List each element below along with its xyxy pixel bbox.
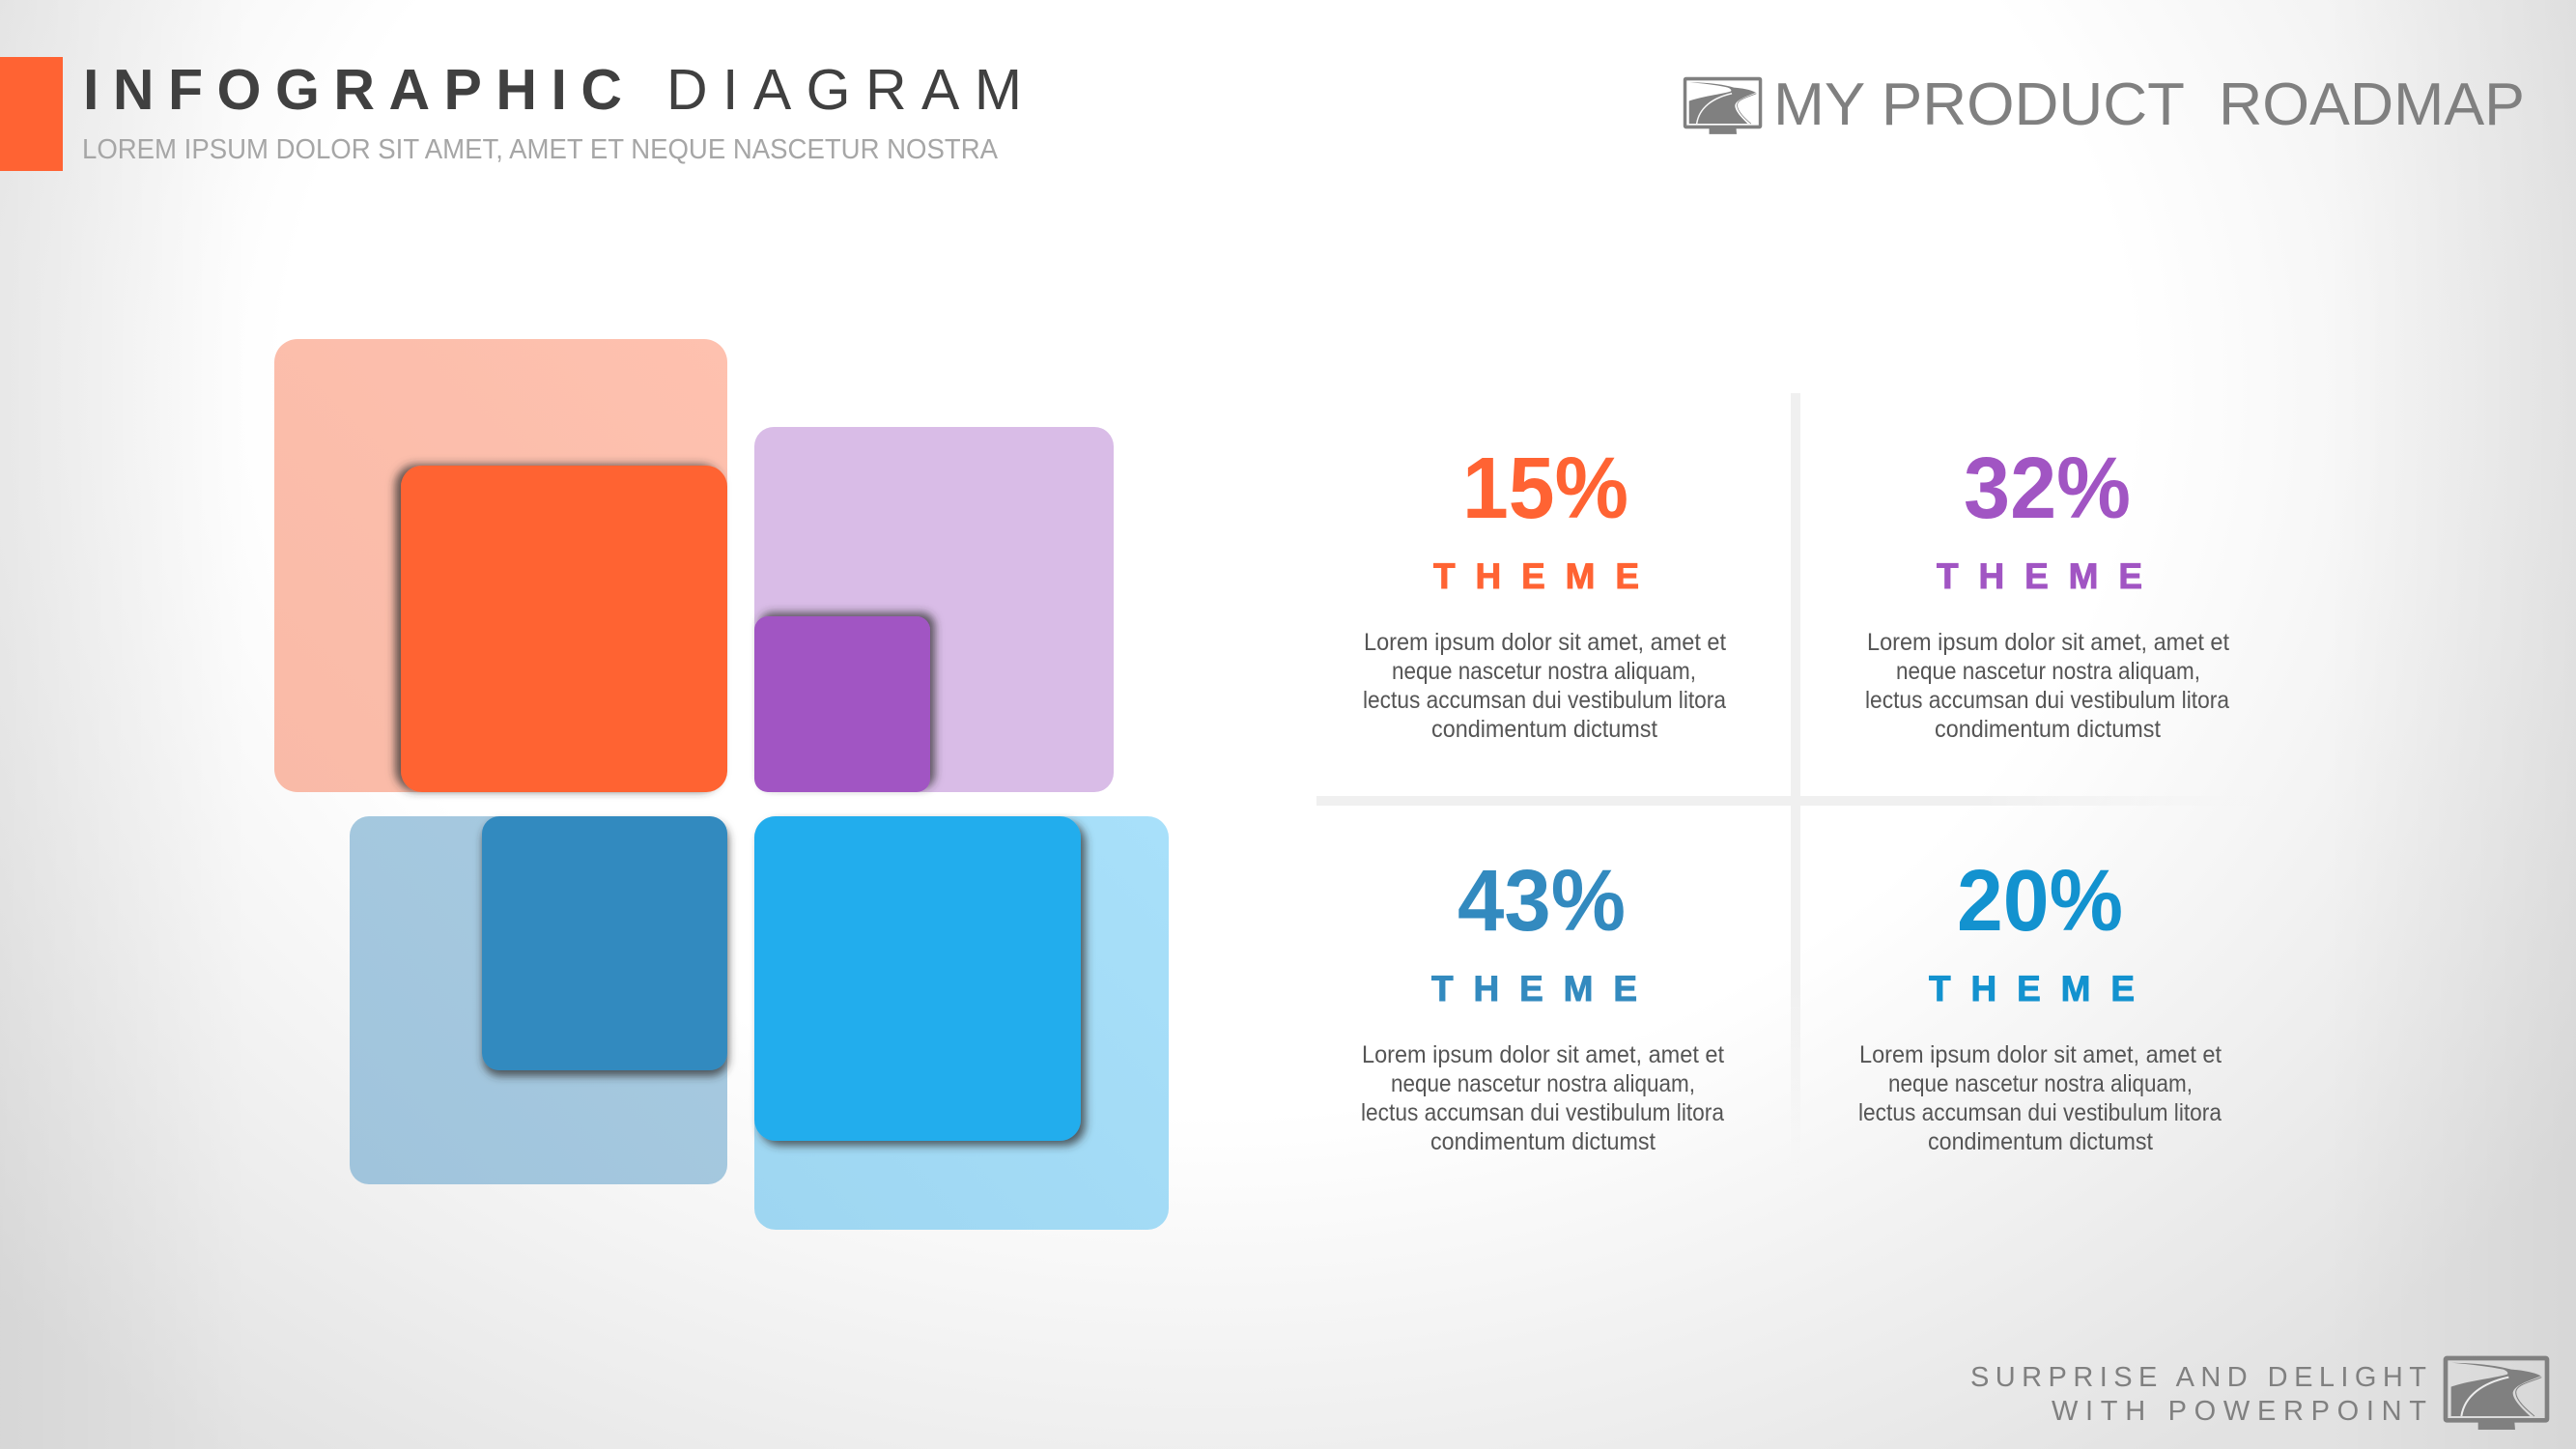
body text: Lorem ipsum dolor sit amet, amet et: [1867, 629, 2229, 656]
stat: 43%: 43%: [1458, 853, 1626, 950]
title: INFOGRAPHIC: [83, 58, 622, 122]
label: theme: THEME: [1433, 556, 1639, 596]
brand heading: MY PRODUCT: [1773, 71, 2185, 138]
body text: lectus accumsan dui vestibulum litora: [1363, 687, 1726, 714]
brand heading: ROADMAP: [2219, 71, 2525, 138]
panel: 20% theme: [1858, 853, 2222, 1155]
body text: [1858, 1041, 2222, 1155]
body text: [1363, 629, 1726, 743]
label: theme: THEME: [1937, 556, 2142, 596]
body text: Lorem ipsum dolor sit amet, amet et: [1362, 1041, 1724, 1068]
grid dividers: [1316, 393, 2263, 1185]
footer tagline: SURPRISE AND DELIGHT: [1970, 1362, 2426, 1393]
body text: condimentum dictumst: [1935, 716, 2161, 743]
title: DIAGRAM: [666, 58, 1022, 122]
subtitle: LOREM IPSUM DOLOR SIT AMET, AMET ET NEQUE NASCETUR NOSTRA: [82, 134, 999, 165]
panel: 43% theme: [1361, 853, 1724, 1155]
icon: roadmap monitor footer: [2446, 1358, 2547, 1430]
body text: condimentum dictumst: [1430, 1128, 1656, 1155]
square: orange: [274, 339, 727, 792]
body text: lectus accumsan dui vestibulum litora: [1858, 1099, 2222, 1126]
body text: neque nascetur nostra aliquam,: [1896, 658, 2200, 685]
body text: neque nascetur nostra aliquam,: [1391, 1070, 1695, 1097]
title: [83, 58, 1022, 122]
body text: neque nascetur nostra aliquam,: [1392, 658, 1696, 685]
orange accent block: [0, 57, 63, 171]
square: steel blue: [350, 816, 727, 1184]
square: purple: [754, 427, 1114, 792]
body text: Lorem ipsum dolor sit amet, amet et: [1364, 629, 1726, 656]
footer tagline: [1970, 1362, 2426, 1427]
body text: condimentum dictumst: [1431, 716, 1657, 743]
footer tagline: WITH POWERPOINT: [2052, 1396, 2426, 1427]
panel: nested squares: [274, 339, 1169, 1230]
panel: 32% theme: [1865, 440, 2229, 743]
stat: 15%: 15%: [1462, 440, 1628, 537]
stat: 20%: 20%: [1957, 853, 2123, 950]
label: theme: THEME: [1431, 969, 1637, 1009]
body text: lectus accumsan dui vestibulum litora: [1865, 687, 2229, 714]
body text: lectus accumsan dui vestibulum litora: [1361, 1099, 1724, 1126]
body text: neque nascetur nostra aliquam,: [1888, 1070, 2193, 1097]
stat: 32%: 32%: [1964, 440, 2131, 537]
body text: Lorem ipsum dolor sit amet, amet et: [1859, 1041, 2222, 1068]
body text: [1361, 1041, 1724, 1155]
brand heading: [1773, 71, 2525, 138]
body text: [1865, 629, 2229, 743]
square: sky blue: [754, 816, 1169, 1230]
icon: roadmap monitor top: [1685, 79, 1761, 134]
label: theme: THEME: [1929, 969, 2135, 1009]
body text: condimentum dictumst: [1928, 1128, 2153, 1155]
panel: 15% theme: [1363, 440, 1726, 743]
